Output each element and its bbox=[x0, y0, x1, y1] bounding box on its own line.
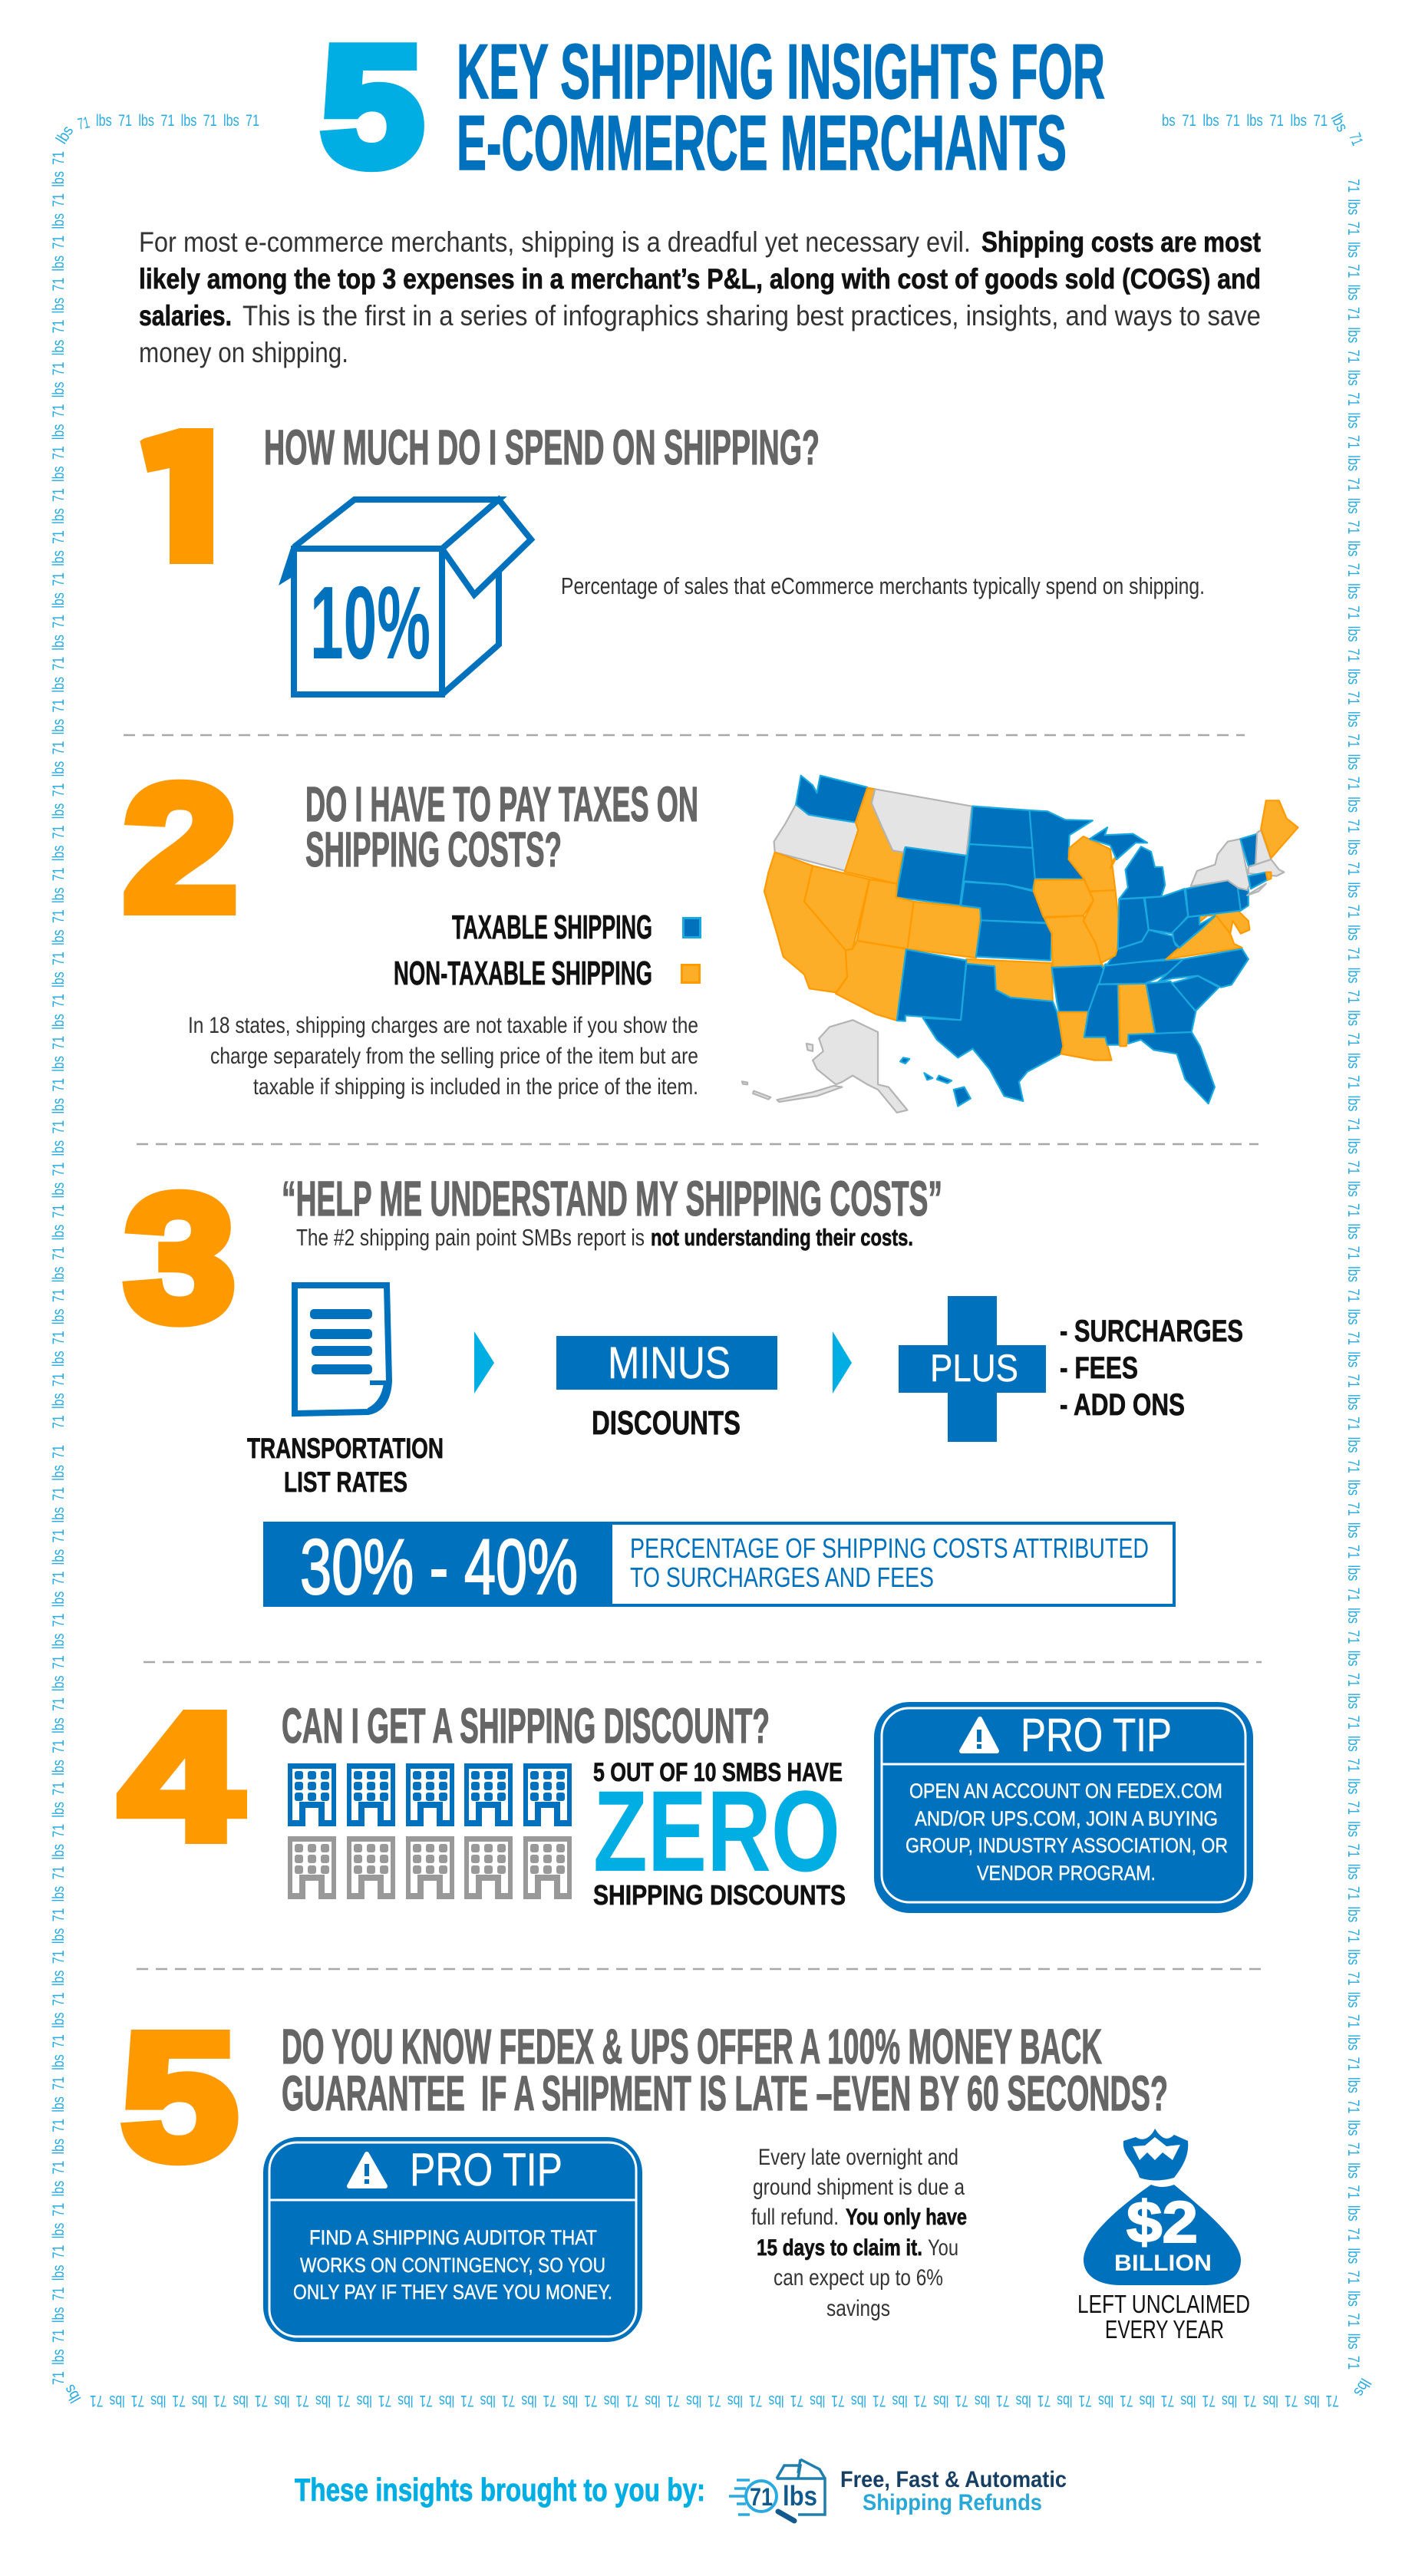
zero discounts stat: ZERO bbox=[593, 1766, 840, 1895]
number 5: 5 bbox=[121, 1996, 238, 2197]
label: left unclaimed every year bbox=[1077, 2290, 1250, 2343]
number 4: 4 bbox=[120, 1676, 242, 1877]
taxes explanation text: charge separately from the selling price of the item but are bbox=[210, 1044, 698, 1069]
late shipment text: savings bbox=[826, 2296, 890, 2321]
callout: pro tip 1: VENDOR PROGRAM. bbox=[977, 1862, 1156, 1885]
decorative border: repeated 71 lbs text: lbs 71 lbs 71 lbs 71 lbs 71 bbox=[96, 112, 259, 130]
subheading: The #2 shipping pain point SMBs report is bbox=[296, 1224, 645, 1251]
big number 5: 5 bbox=[321, 12, 424, 202]
late shipment text: Every late overnight and bbox=[758, 2145, 958, 2170]
late shipment text: can expect up to 6% bbox=[774, 2265, 943, 2291]
callout: pro tip 2: FIND A SHIPPING AUDITOR THAT bbox=[309, 2226, 597, 2249]
heading 3: “HELP ME UNDERSTAND MY SHIPPING COSTS” bbox=[282, 1171, 942, 1226]
heading 5 bbox=[282, 2019, 1168, 2121]
decorative border: repeated 71 lbs text: lbs bbox=[1350, 2376, 1374, 2400]
late shipment text: 15 days to claim it. bbox=[757, 2235, 922, 2261]
late shipment text bbox=[751, 2145, 967, 2321]
decorative border: repeated 71 lbs text: lbs bbox=[1328, 111, 1351, 135]
minus box: MINUS bbox=[608, 1338, 731, 1388]
zero discounts stat: 5 OUT OF 10 SMBS HAVE bbox=[593, 1758, 843, 1787]
late shipment text: You only have bbox=[846, 2205, 967, 2230]
decorative border: repeated 71 lbs text: lbs bbox=[61, 2382, 84, 2406]
icon: document bbox=[295, 1285, 389, 1413]
title bbox=[321, 12, 1105, 202]
logo slogan: Free, Fast & Automatic bbox=[840, 2467, 1067, 2492]
legend: NON-TAXABLE SHIPPING bbox=[394, 955, 652, 992]
callout: pro tip 2: WORKS ON CONTINGENCY, SO YOU bbox=[300, 2254, 605, 2277]
intro paragraph bbox=[139, 226, 1261, 368]
heading 1: HOW MUCH DO I SPEND ON SHIPPING? bbox=[264, 420, 820, 475]
callout: pro tip 2 bbox=[266, 2140, 639, 2339]
heading 2: DO I HAVE TO PAY TAXES ON bbox=[305, 777, 698, 832]
taxes explanation text: taxable if shipping is included in the price of the item. bbox=[253, 1074, 698, 1100]
panel: section 2 taxes bbox=[123, 747, 1298, 1113]
logo slogan: Shipping Refunds bbox=[863, 2490, 1042, 2515]
stat banner 30% - 40% bbox=[263, 1522, 1174, 1611]
callout: pro tip 1: AND/OR UPS.COM, JOIN A BUYING bbox=[915, 1807, 1218, 1830]
decorative border: repeated 71 lbs text: 71 bbox=[76, 114, 91, 134]
panel: section 3 understanding costs bbox=[124, 1157, 1243, 1611]
callout: pro tip 1 bbox=[877, 1705, 1250, 1910]
icons: gray buildings row bbox=[288, 1836, 572, 1899]
intro paragraph: This is the first in a series of infographics sharing best practices, insights, and ways to save bbox=[242, 300, 1261, 331]
decorative border: repeated 71 lbs text: lbs bbox=[53, 123, 77, 147]
icon: money bag: BILLION bbox=[1114, 2251, 1212, 2276]
zero discounts stat bbox=[593, 1758, 846, 1911]
callout: pro tip 2: ONLY PAY IF THEY SAVE YOU MONEY. bbox=[293, 2281, 612, 2304]
late shipment text: You bbox=[928, 2235, 958, 2261]
icon: 71 lbs logo: lbs bbox=[783, 2480, 817, 2512]
subheading: not understanding their costs. bbox=[651, 1224, 913, 1251]
icon: open box with 10%: 10% bbox=[310, 565, 430, 681]
label: transportation list rates bbox=[247, 1433, 444, 1498]
number 2: 2 bbox=[123, 747, 238, 948]
icon: open box with 10% bbox=[279, 500, 531, 694]
number 3: 3 bbox=[124, 1157, 236, 1358]
plus sign: PLUS bbox=[930, 1347, 1018, 1390]
intro paragraph: salaries. bbox=[139, 300, 232, 331]
heading 4: CAN I GET A SHIPPING DISCOUNT? bbox=[282, 1698, 770, 1753]
legend bbox=[394, 909, 700, 992]
decorative border: repeated 71 lbs text: 71 lbs 71 lbs 71 lbs 71 lbs 71 lbs 71 lbs 71 lbs 71 lbs 71 lbs 71 lbs 71 lbs 71 lbs 71 lbs 71 lbs 71 lbs 71 lbs 71 lbs 71 lbs 71 lbs 71 lbs 71 lbs 71 lbs 71 bbox=[50, 1445, 68, 2385]
list: surcharges fees add ons bbox=[1060, 1314, 1243, 1422]
label: transportation list rates: TRANSPORTATION bbox=[247, 1433, 444, 1464]
label: left unclaimed every year: LEFT UNCLAIMED bbox=[1077, 2290, 1250, 2318]
icon: 71 lbs logo: 71 bbox=[750, 2483, 773, 2511]
callout: pro tip 1: GROUP, INDUSTRY ASSOCIATION, OR bbox=[906, 1834, 1228, 1857]
intro paragraph: For most e-commerce merchants, shipping is a dreadful yet necessary evil. bbox=[139, 226, 971, 258]
decorative border: repeated 71 lbs text: 71 bbox=[1345, 130, 1366, 148]
panel: section 1 how much do I spend bbox=[138, 398, 1205, 694]
map: US states tax status bbox=[742, 776, 1298, 1113]
number 1: 1 bbox=[138, 398, 245, 612]
panel: section 5 money back guarantee bbox=[121, 1996, 1250, 2343]
logo slogan bbox=[840, 2467, 1067, 2515]
intro paragraph: likely among the top 3 expenses in a merchant’s P&L, along with cost of goods sold (COGS) and bbox=[139, 263, 1261, 295]
intro paragraph: Shipping costs are most bbox=[981, 226, 1261, 258]
arrow 2 bbox=[833, 1331, 852, 1394]
taxes explanation text: In 18 states, shipping charges are not taxable if you show the bbox=[188, 1013, 698, 1038]
callout: pro tip 1: OPEN AN ACCOUNT ON FEDEX.COM bbox=[909, 1779, 1222, 1803]
description text: Percentage of sales that eCommerce merchants typically spend on shipping. bbox=[561, 572, 1205, 599]
arrow 1 bbox=[474, 1331, 494, 1394]
footer tagline: These insights brought to you by: bbox=[295, 2472, 705, 2508]
late shipment text: ground shipment is due a bbox=[753, 2175, 965, 2200]
list: surcharges fees add ons: - FEES bbox=[1060, 1351, 1138, 1385]
callout: pro tip 2: PRO TIP bbox=[410, 2144, 562, 2195]
plus sign bbox=[899, 1296, 1046, 1442]
minus box bbox=[556, 1336, 777, 1390]
label: discounts: DISCOUNTS bbox=[592, 1404, 741, 1442]
late shipment text: full refund. bbox=[751, 2205, 839, 2230]
icon: money bag bbox=[1084, 2129, 1241, 2285]
list: surcharges fees add ons: - ADD ONS bbox=[1060, 1388, 1185, 1422]
heading 2 bbox=[305, 777, 698, 877]
decorative border: repeated 71 lbs text: bs 71 lbs 71 lbs 71 lbs 71 bbox=[1162, 112, 1328, 130]
stat banner 30% - 40%: PERCENTAGE OF SHIPPING COSTS ATTRIBUTED bbox=[630, 1532, 1149, 1564]
taxes explanation text bbox=[188, 1013, 698, 1100]
stat banner 30% - 40%: TO SURCHARGES AND FEES bbox=[630, 1562, 934, 1593]
intro paragraph: money on shipping. bbox=[139, 337, 348, 368]
heading 2: SHIPPING COSTS? bbox=[305, 822, 562, 877]
label: transportation list rates: LIST RATES bbox=[284, 1466, 407, 1498]
panel: section 4 discounts bbox=[120, 1676, 1250, 1911]
icon: 71 lbs logo bbox=[729, 2459, 825, 2521]
footer bbox=[295, 2459, 1067, 2521]
callout: pro tip 1: PRO TIP bbox=[1021, 1709, 1172, 1761]
icons: blue buildings row bbox=[288, 1763, 572, 1826]
label: left unclaimed every year: EVERY YEAR bbox=[1105, 2315, 1224, 2343]
legend: TAXABLE SHIPPING bbox=[452, 909, 652, 946]
stat banner 30% - 40%: 30% - 40% bbox=[300, 1523, 578, 1611]
icon: money bag: $2 bbox=[1127, 2190, 1198, 2255]
zero discounts stat: SHIPPING DISCOUNTS bbox=[593, 1879, 846, 1911]
list: surcharges fees add ons: - SURCHARGES bbox=[1060, 1314, 1243, 1348]
